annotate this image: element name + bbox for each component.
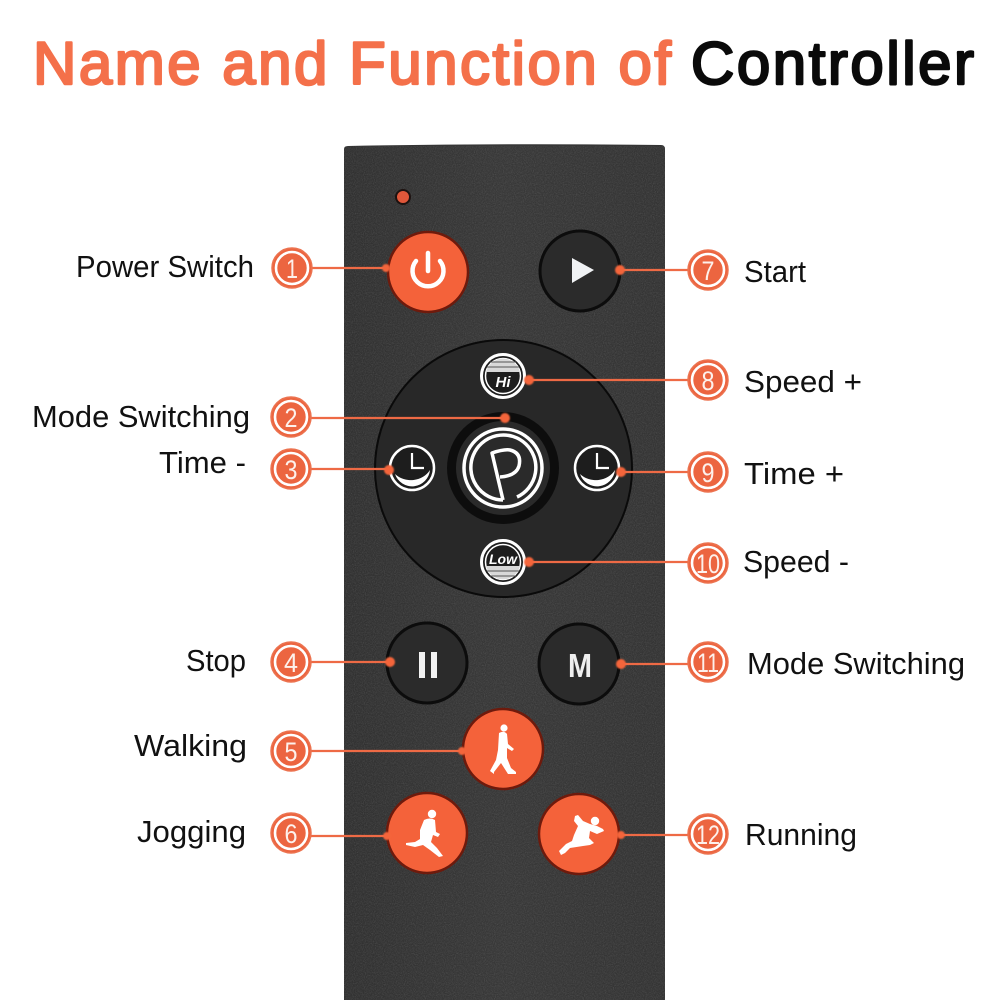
leader 9: time plus: 9 [702,458,714,488]
leader 9: time plus [616,452,844,492]
button: P mode [464,429,542,507]
directional ring [375,340,632,597]
button: M mode: M [568,647,592,684]
title: Name and Function of [33,30,671,97]
leader 3: time minus: 3 [284,455,298,485]
leader 9: time plus: Time + [744,456,844,491]
leader 3: time minus [159,445,394,489]
button: time plus [574,445,620,491]
leader 6: jogging: Jogging [137,814,246,849]
button: jogging [387,793,467,873]
leader 7: start: 7 [702,256,714,286]
leader 12: running: Running [745,817,857,852]
leader 12: running: 12 [696,820,720,850]
leader 4: stop [186,642,395,682]
leader 7: start [615,250,806,290]
leader 2: mode switching [32,397,510,437]
leader 5: walking: 5 [284,737,298,767]
leader 5: walking [134,728,466,771]
leader 11: mode switching: 11 [697,648,719,678]
leader 5: walking: Walking [134,728,247,763]
leader 8: speed plus: 8 [702,366,714,396]
leader 1: power switch: Power Switch [76,249,254,284]
indicator light [396,190,410,204]
button: Hi speed up [480,353,526,399]
leader 8: speed plus [524,360,862,400]
button: running [539,794,619,874]
leader 2: mode switching: Mode Switching [32,399,250,434]
leader 1: power switch: 1 [286,254,298,284]
button: stop [387,623,467,703]
button: start [540,231,620,311]
button: Low speed down [480,539,526,585]
button: walking [463,709,543,789]
leader 8: speed plus: Speed + [744,364,862,399]
leader 6: jogging: 6 [284,819,298,849]
leader 12: running [617,814,857,854]
button: Hi speed up: Hi [496,374,511,391]
leader 10: speed minus: 10 [696,549,720,579]
leader 11: mode switching: Mode Switching [747,646,965,681]
button: time minus [389,445,435,491]
title: Controller [691,30,974,97]
leader 7: start: Start [744,254,806,289]
leader 10: speed minus: Speed - [743,544,849,579]
button: power [388,232,468,312]
leader 11: mode switching [616,642,965,682]
button: Low speed down: Low [489,551,518,567]
leader 6: jogging [137,813,391,853]
leader 4: stop: Stop [186,643,246,678]
leader 4: stop: 4 [284,648,298,678]
leader 3: time minus: Time - [159,445,246,480]
leader 10: speed minus [524,543,849,583]
remote control body [344,144,665,1000]
leader 1: power switch [76,248,390,288]
leader 2: mode switching: 2 [284,403,298,433]
button: M mode [539,624,619,704]
